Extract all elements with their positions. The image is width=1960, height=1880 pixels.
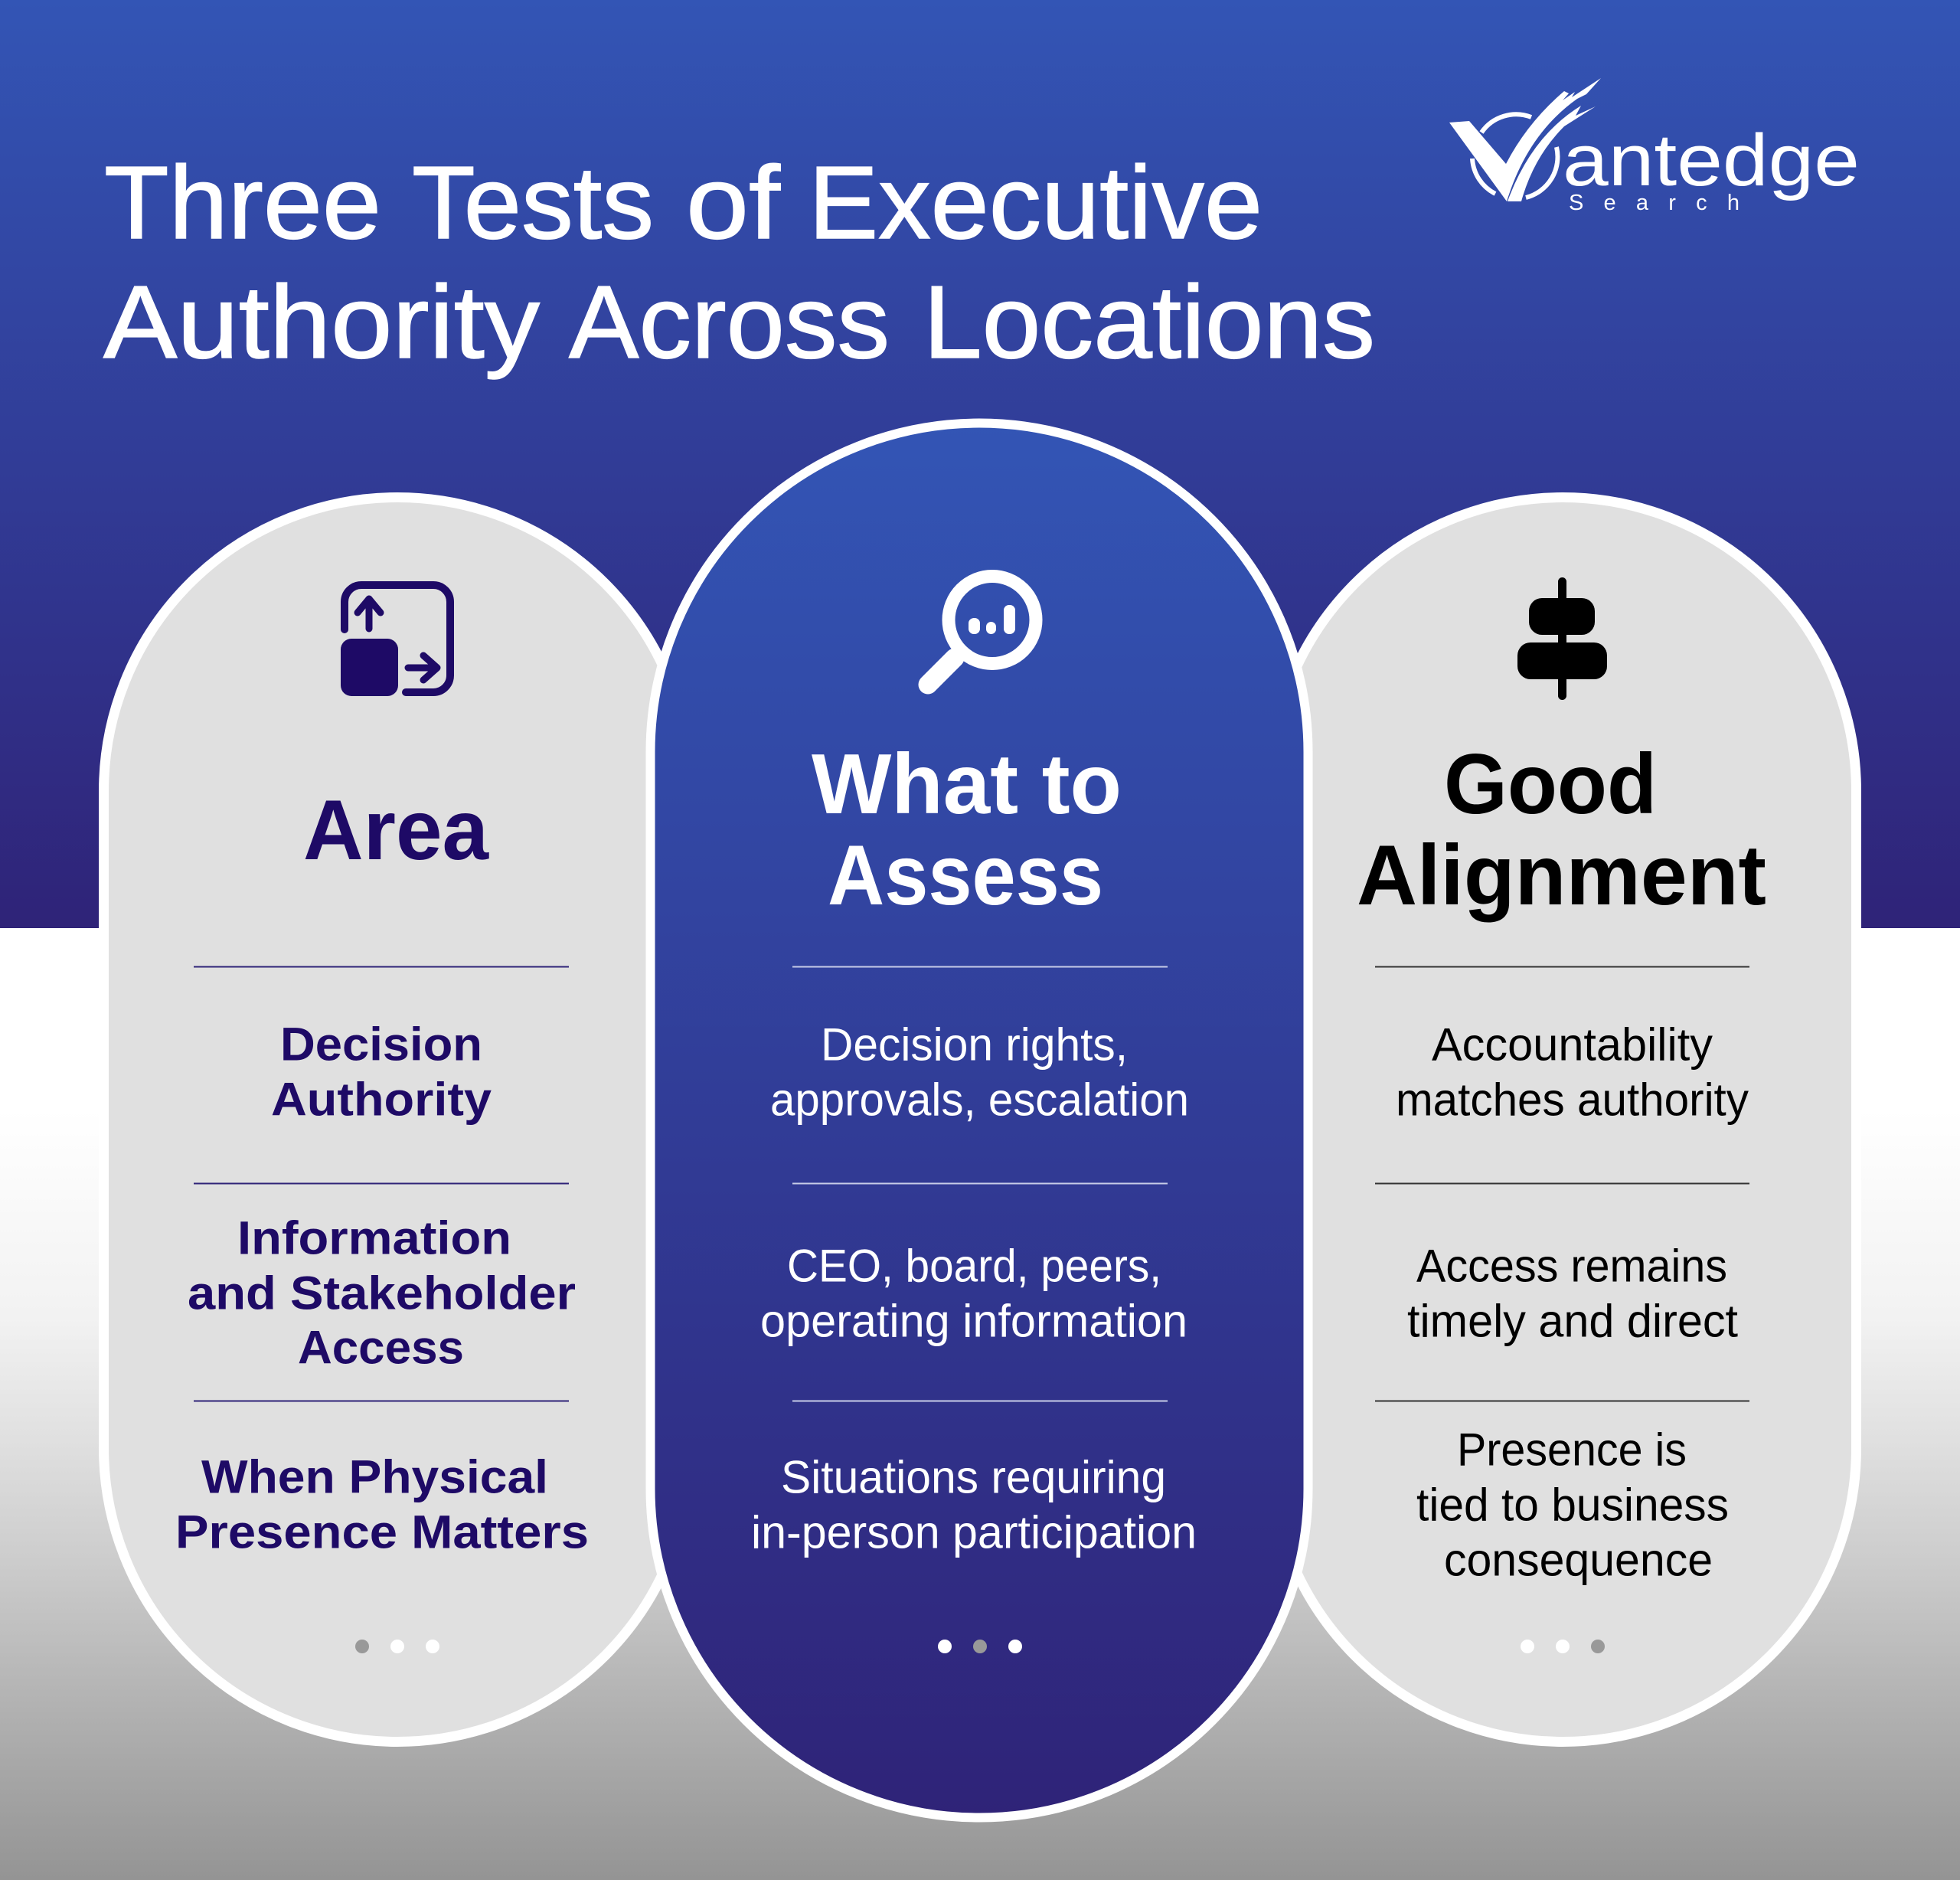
pagination dots: Good Alignment — [1521, 1640, 1605, 1653]
title: Three — [104, 145, 381, 260]
background: blue top band — [0, 0, 1960, 928]
panel: Area — [104, 498, 691, 1741]
logo: Vantedge Search: Search — [1569, 191, 1740, 215]
title: Locations — [923, 264, 1375, 380]
text: Area rows — [175, 1018, 589, 1558]
text: What to Assess rows: approvals, escalation — [770, 1074, 1189, 1126]
title: Tests — [412, 145, 654, 260]
text: Good Alignment rows — [1396, 1018, 1749, 1585]
heading: Good Alignment — [1357, 737, 1766, 923]
logo: Vantedge Search — [1449, 78, 1860, 215]
text: Good Alignment rows: tied to business — [1416, 1479, 1729, 1530]
text: What to Assess rows — [751, 1018, 1197, 1558]
title: Executive — [808, 145, 1263, 260]
background: white to grey lower band — [0, 928, 1960, 1880]
logo: Vantedge Search: antedge — [1563, 119, 1860, 201]
pagination dots: Area — [355, 1640, 439, 1653]
heading: What to Assess — [812, 737, 1122, 923]
text: Good Alignment rows: Access remains — [1416, 1241, 1727, 1291]
panel: What to Assess — [651, 423, 1308, 1818]
icon: magnifier with bars — [928, 576, 1036, 685]
text: Area rows: Authority — [271, 1074, 492, 1126]
heading: Area: Area — [303, 783, 489, 878]
dividers: What to Assess column — [792, 966, 1168, 1401]
text: Good Alignment rows: matches authority — [1396, 1074, 1749, 1126]
heading: What to Assess: What to — [812, 737, 1122, 832]
icon: center alignment — [1517, 577, 1607, 700]
text: What to Assess rows: operating information — [760, 1296, 1187, 1346]
title: of — [686, 145, 781, 260]
dividers: Area column — [194, 966, 569, 1401]
title: Across — [569, 264, 890, 380]
heading: What to Assess: Assess — [828, 828, 1103, 923]
title — [103, 145, 1375, 380]
text: Area rows: and Stakeholder — [188, 1267, 576, 1319]
text: What to Assess rows: Situations requiring — [781, 1452, 1166, 1502]
pagination dots: What to Assess — [938, 1640, 1022, 1653]
text: Good Alignment rows: Accountability — [1432, 1018, 1713, 1071]
text: What to Assess rows: Decision rights, — [821, 1018, 1128, 1071]
text: What to Assess rows: in-person participation — [751, 1507, 1197, 1558]
text: Good Alignment rows: consequence — [1444, 1535, 1713, 1585]
title: Authority — [103, 264, 541, 380]
text: Area rows: Access — [298, 1322, 464, 1374]
text: Area rows: Presence Matters — [175, 1506, 589, 1558]
icon: resize square with arrows — [341, 585, 450, 696]
dividers: Good Alignment column — [1375, 966, 1749, 1401]
text: Area rows: Decision — [280, 1018, 482, 1071]
panel: Good Alignment — [1269, 498, 1856, 1741]
text: Area rows: Information — [237, 1211, 511, 1264]
heading: Good Alignment: Alignment — [1357, 828, 1766, 923]
text: Good Alignment rows: Presence is — [1457, 1424, 1687, 1475]
heading: Good Alignment: Good — [1444, 737, 1657, 832]
text: Area rows: When Physical — [201, 1450, 548, 1502]
text: What to Assess rows: CEO, board, peers, — [787, 1241, 1161, 1291]
text: Good Alignment rows: timely and direct — [1407, 1296, 1738, 1346]
